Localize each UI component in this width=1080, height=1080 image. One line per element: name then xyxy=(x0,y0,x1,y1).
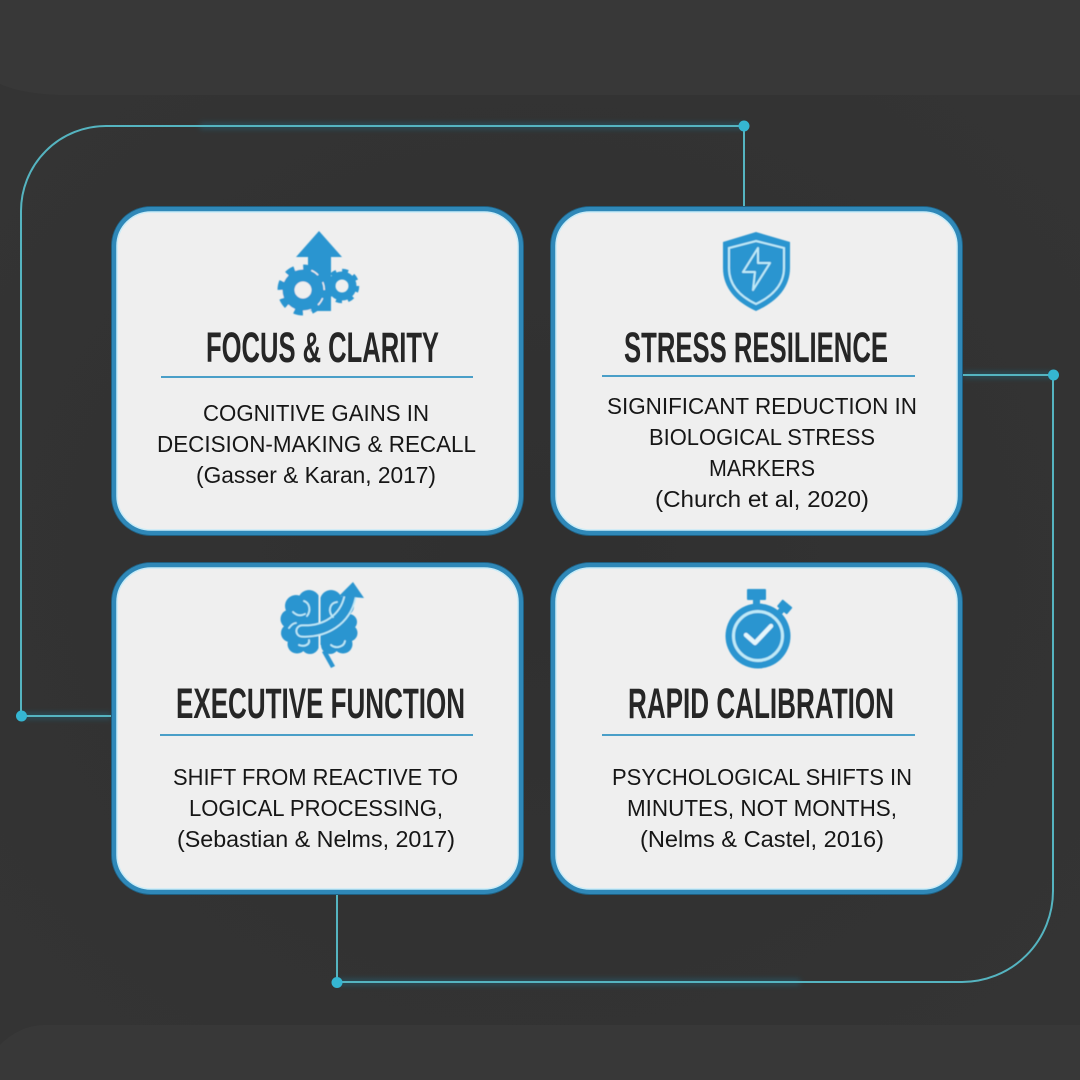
heading: EXECUTIVE FUNCTION xyxy=(176,680,465,728)
body text: SHIFT FROM REACTIVE TO xyxy=(173,764,458,790)
body text: (Nelms & Castel, 2016) xyxy=(640,826,884,852)
body text xyxy=(607,393,917,512)
body text: MARKERS xyxy=(709,455,815,481)
body text: (Gasser & Karan, 2017) xyxy=(196,462,436,488)
panel: executive function xyxy=(113,564,522,893)
body text: DECISION-MAKING & RECALL xyxy=(157,431,476,457)
body text: COGNITIVE GAINS IN xyxy=(203,400,429,426)
body text: PSYCHOLOGICAL SHIFTS IN xyxy=(612,764,912,790)
body text: BIOLOGICAL STRESS xyxy=(649,424,875,450)
body text xyxy=(157,400,476,488)
body text: (Church et al, 2020) xyxy=(655,486,869,512)
body text: MINUTES, NOT MONTHS, xyxy=(627,795,897,821)
body text: (Sebastian & Nelms, 2017) xyxy=(177,826,455,852)
icon: brain with rising arrow xyxy=(280,582,364,668)
icon: shield with lightning bolt xyxy=(723,232,790,311)
body text xyxy=(173,764,458,852)
body text xyxy=(612,764,912,852)
body text: SIGNIFICANT REDUCTION IN xyxy=(607,393,917,419)
heading: STRESS RESILIENCE xyxy=(624,324,888,372)
connector lines xyxy=(16,120,1059,988)
icon: arrow and gears xyxy=(281,231,357,312)
panel: rapid calibration xyxy=(552,564,961,893)
panel: focus and clarity xyxy=(113,208,522,534)
panel: stress resilience xyxy=(552,208,961,534)
body text: LOGICAL PROCESSING, xyxy=(189,795,443,821)
icon: stopwatch with check xyxy=(726,589,793,668)
connector dots xyxy=(16,120,1059,988)
heading: FOCUS & CLARITY xyxy=(206,324,439,372)
heading: RAPID CALIBRATION xyxy=(628,680,894,728)
